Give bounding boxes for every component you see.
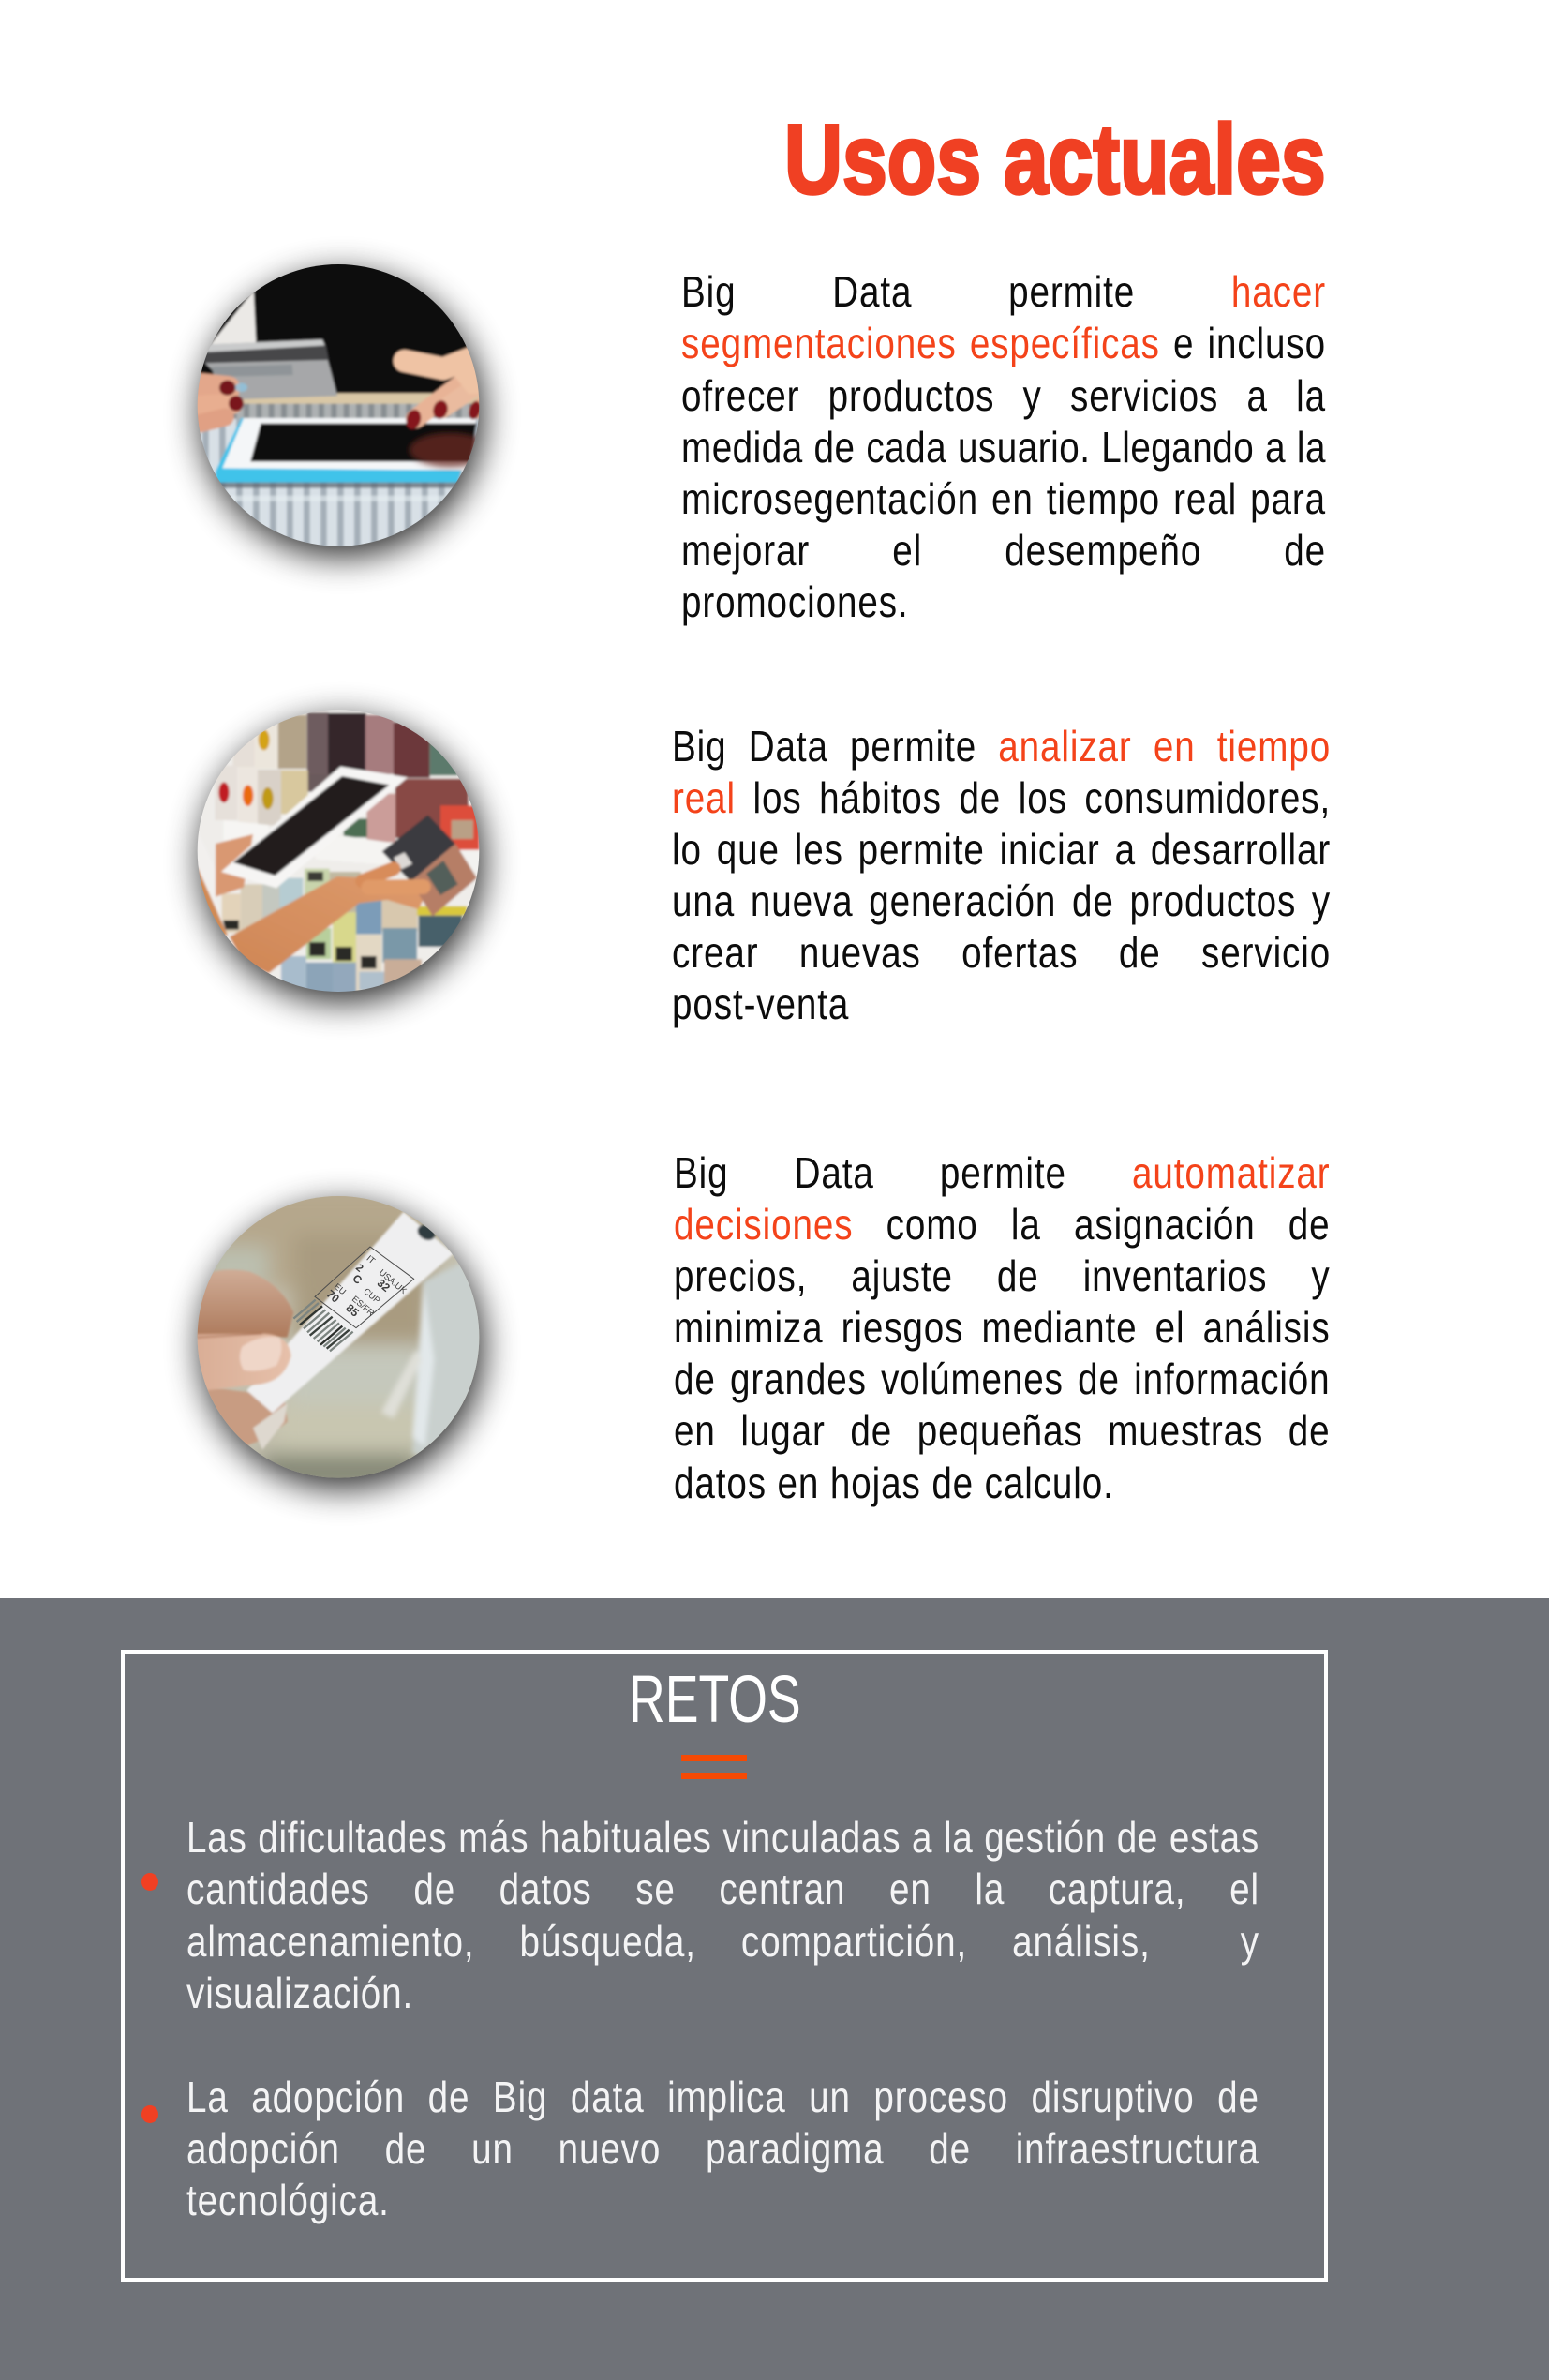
text block: automatizar decisiones: decisiones como la asignación de <box>674 1200 1331 1249</box>
photo: hand holding barcode tag: C <box>350 1272 365 1287</box>
text block: automatizar decisiones: Big Data permite automatizar <box>674 1147 1331 1196</box>
text block: dificultades: Las dificultades más habituales vinculadas a la gestión de estas <box>186 1813 1259 1862</box>
photo: hand holding barcode tag: IT <box>365 1253 377 1265</box>
text block: automatizar decisiones: precios, ajuste de inventarios y <box>674 1251 1331 1300</box>
text block: tiempo real: crear nuevas ofertas de servicio <box>672 928 1331 977</box>
text block: dificultades: almacenamiento, búsqueda, compartición, análisis, y <box>186 1917 1259 1966</box>
photo: hand holding barcode tag: EU <box>333 1281 348 1296</box>
text block: automatizar decisiones: en lugar de pequeñas muestras de <box>674 1406 1331 1455</box>
panel: retos <box>0 1598 1549 2380</box>
text block: tiempo real: una nueva generación de productos y <box>672 876 1331 925</box>
bullet 1 <box>141 1873 158 1891</box>
text block: adopcion: adopción de un nuevo paradigma de infraestructura <box>186 2124 1259 2173</box>
icon: double bar <box>681 1755 747 1779</box>
text block: segmentaciones <box>681 267 1326 626</box>
photo: hand holding barcode tag: ES/FR <box>350 1295 376 1318</box>
text block: adopcion: La adopción de Big data implica un proceso disruptivo de <box>186 2073 1259 2121</box>
bullet 2 <box>141 2105 158 2123</box>
text block: tiempo real: lo que les permite iniciar a desarrollar <box>672 825 1331 874</box>
title: Usos actuales <box>784 105 1326 215</box>
text block: automatizar decisiones <box>674 1147 1331 1507</box>
text block: automatizar decisiones: datos en hojas de calculo. <box>674 1459 1114 1507</box>
text block: tiempo real <box>672 722 1331 1028</box>
text block: dificultades: cantidades de datos se centran en la captura, el <box>186 1864 1259 1913</box>
photo: tablet and product in a shop <box>173 692 511 1029</box>
photo: hand holding barcode tag: 85 <box>343 1301 362 1320</box>
text block: tiempo real: Big Data permite analizar en tiempo <box>672 722 1331 771</box>
text block: adopcion: tecnológica. <box>186 2176 390 2224</box>
text block: dificultades: visualización. <box>186 1968 413 2017</box>
photo: hand holding barcode tag: 2 <box>353 1262 365 1275</box>
photo: hand holding barcode tag <box>173 1178 511 1516</box>
retos heading: RETOS <box>629 1663 801 1737</box>
text block: segmentaciones: microsegentación en tiempo real para <box>681 474 1326 523</box>
text block: adopcion <box>186 2073 1259 2224</box>
retos frame <box>121 1650 1328 2282</box>
photo: hand holding barcode tag: 32 <box>375 1277 393 1295</box>
text block: automatizar decisiones: de grandes volúmenes de información <box>674 1355 1331 1403</box>
text block: segmentaciones: mejorar el desempeño de <box>681 526 1326 575</box>
text block: tiempo real: post-venta <box>672 980 849 1028</box>
text block: segmentaciones: Big Data permite hacer <box>681 267 1326 316</box>
text block: segmentaciones: promociones. <box>681 577 909 626</box>
text block: dificultades <box>186 1813 1259 2017</box>
text block: segmentaciones: segmentaciones específicas e incluso <box>681 319 1326 367</box>
photo: hand holding barcode tag: 70 <box>324 1287 342 1306</box>
photo: hand holding barcode tag: USA.UK <box>378 1267 409 1296</box>
text block: automatizar decisiones: minimiza riesgos mediante el análisis <box>674 1303 1331 1352</box>
photo: hand holding barcode tag: CUP <box>362 1286 382 1306</box>
text block: segmentaciones: medida de cada usuario. Llegando a la <box>681 423 1326 472</box>
photo: card payment on tablet <box>173 247 511 584</box>
text block: segmentaciones: ofrecer productos y servicios a la <box>681 371 1326 420</box>
text block: tiempo real: real los hábitos de los consumidores, <box>672 773 1331 822</box>
